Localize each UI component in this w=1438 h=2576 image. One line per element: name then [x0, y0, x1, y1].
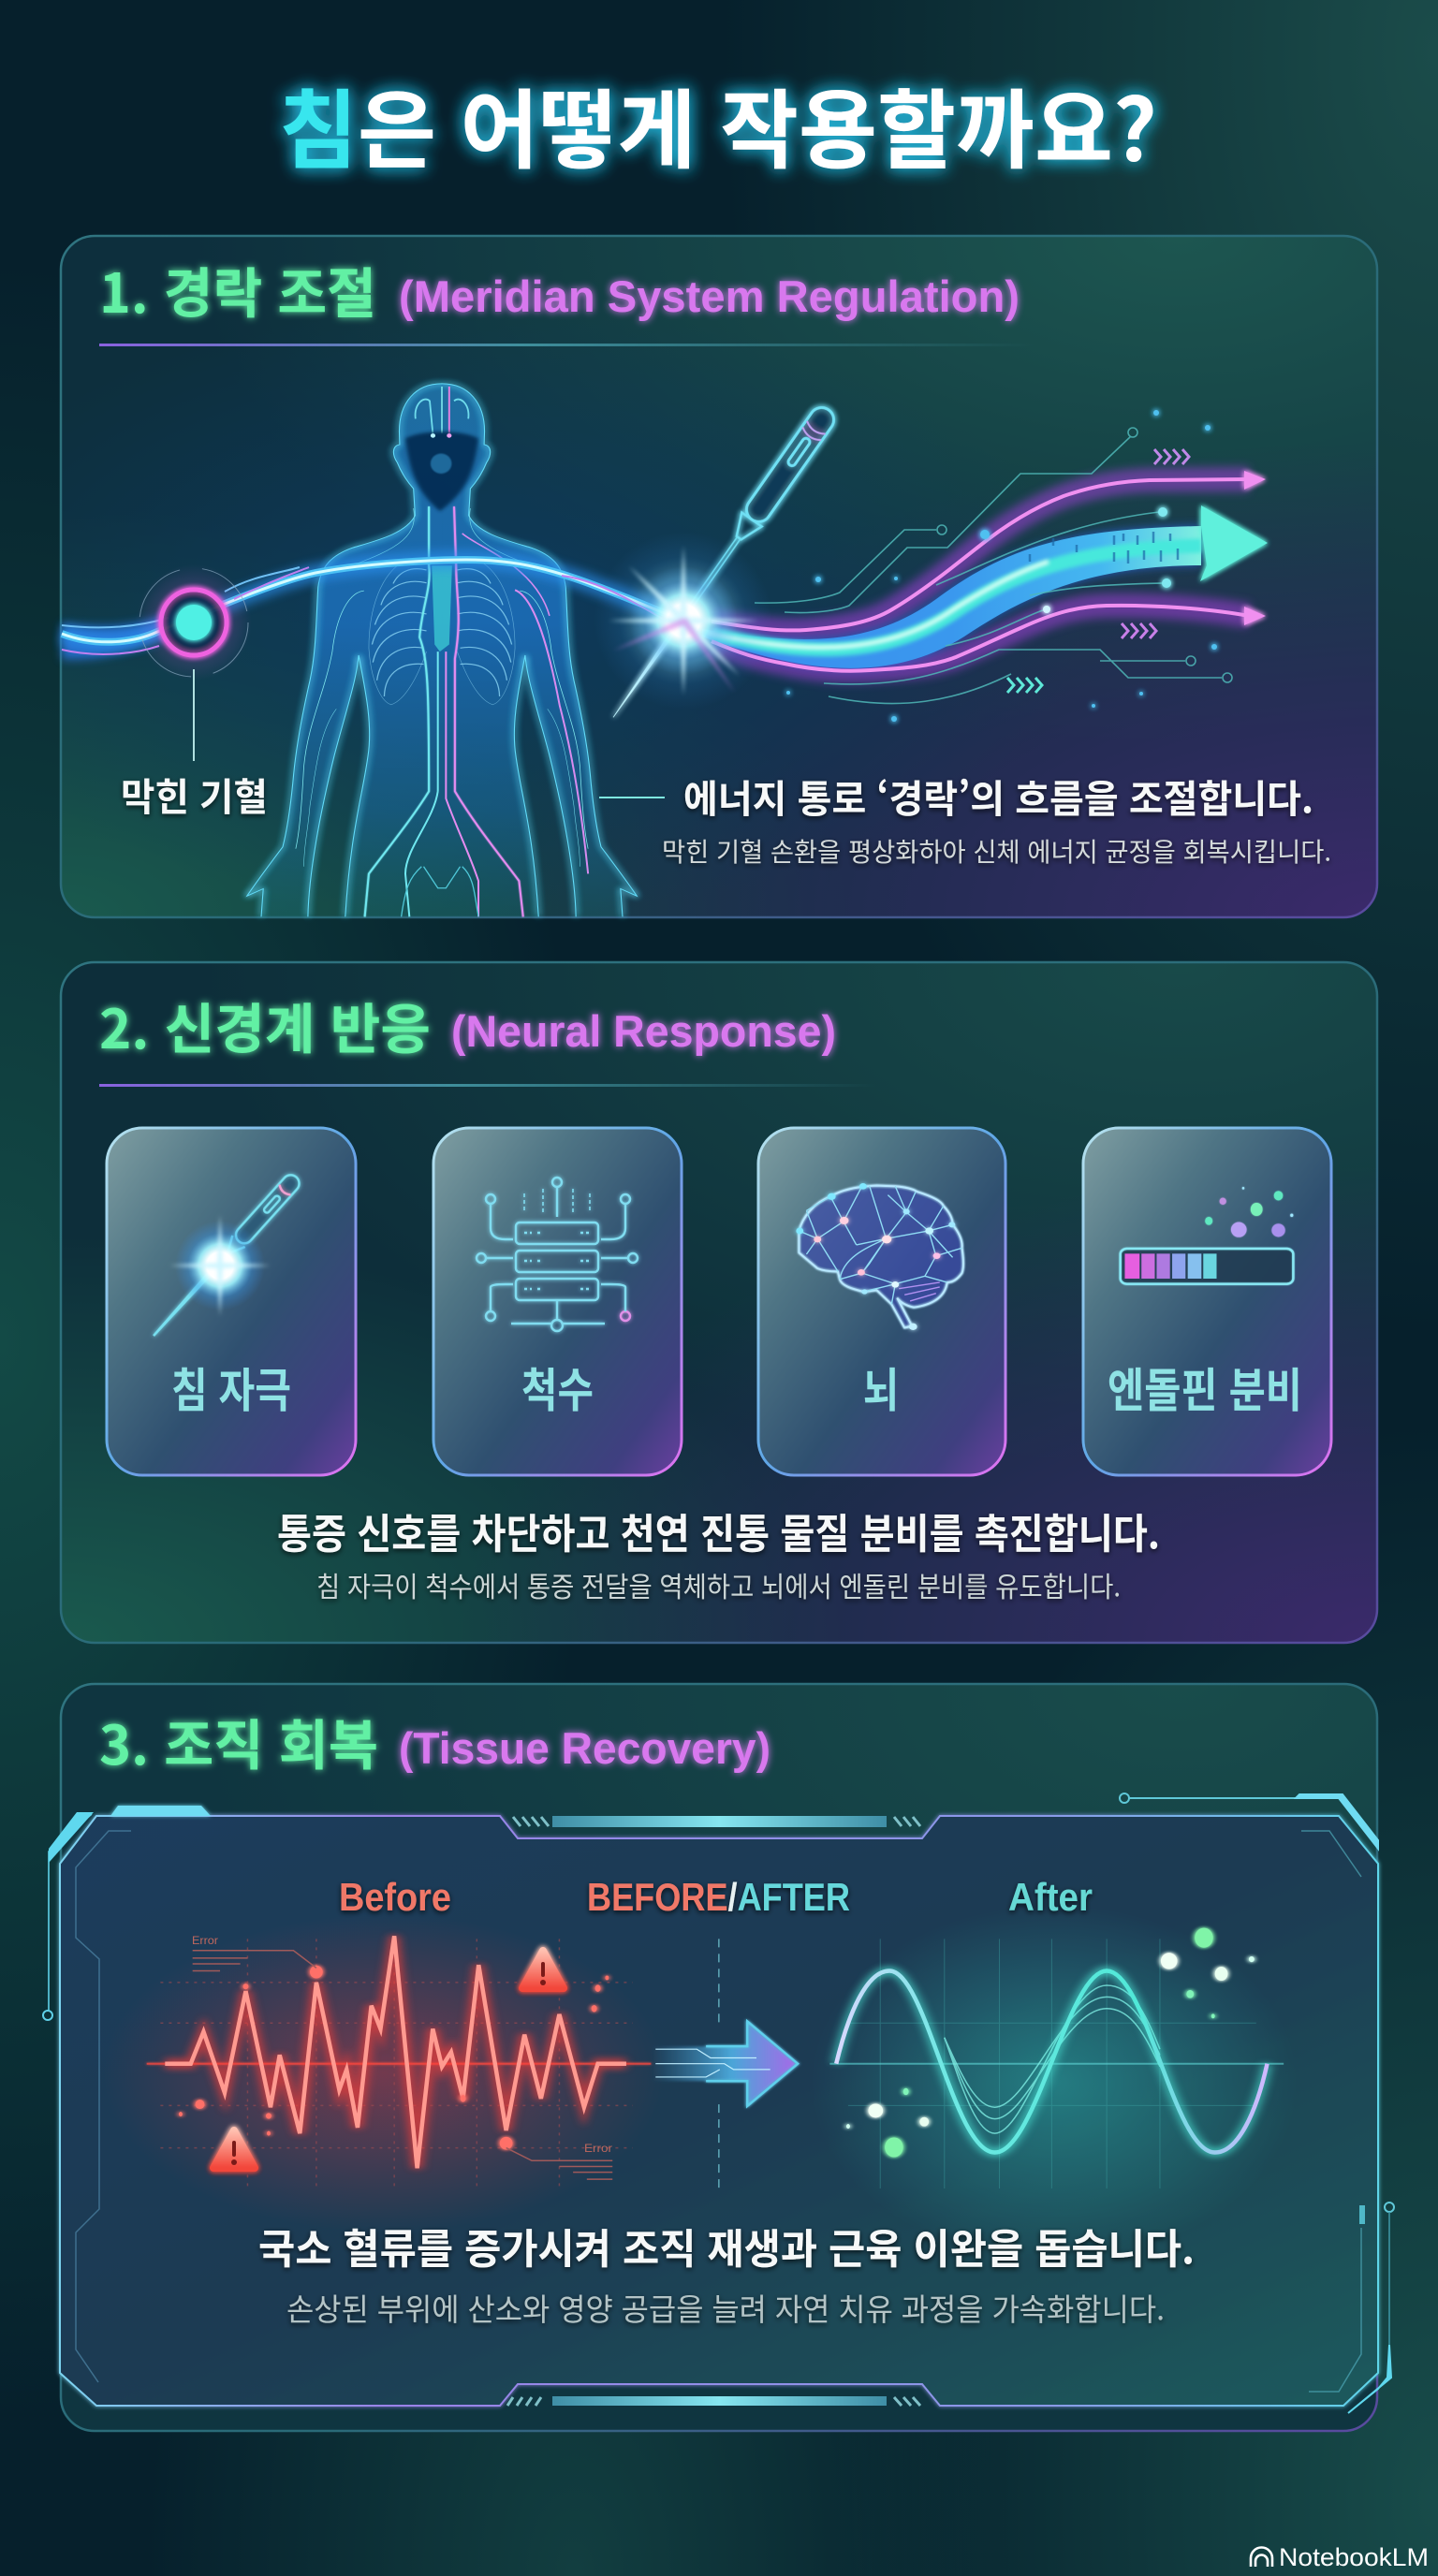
soft glows behind charts [103, 1905, 1298, 2261]
small error labels: Error [192, 1934, 218, 1947]
icon: notebook arcs [1251, 2548, 1272, 2567]
wordmark: NotebookLM [1279, 2543, 1429, 2571]
heading 2 english: (Neural Response) [451, 1006, 836, 1056]
card: needle stimulus [107, 1128, 356, 1475]
title: 침은 어떻게 작용할까요? [279, 62, 1157, 186]
heading 3 korean: 3. 조직 회복 [99, 1702, 378, 1780]
left meridian flow [62, 560, 683, 659]
panel: 3 tissue recovery [43, 1684, 1394, 2431]
icon: warning triangle bottom [213, 2130, 255, 2168]
small glow dots [786, 410, 1217, 722]
label: after: After [1008, 1875, 1093, 1919]
label: before: Before [339, 1875, 451, 1919]
label: 침 자극 [171, 1354, 291, 1421]
icon: glowing brain [796, 1183, 963, 1330]
icon: progress bar with particles [1121, 1187, 1293, 1284]
right flow streams [702, 479, 1249, 671]
center arrow [651, 1939, 798, 2188]
icon: needle with spark [147, 1172, 302, 1341]
card: spinal cord [433, 1128, 682, 1475]
panel 2 statement: 통증 신호를 차단하고 천연 진통 물질 분비를 촉진합니다. [277, 1500, 1160, 1560]
chart: irregular red signal [147, 1936, 651, 2188]
small error labels: Error [584, 2142, 612, 2155]
panel 3 detail: 손상된 부위에 산소와 영양 공급을 늘려 자연 치유 과정을 가속화합니다. [286, 2285, 1165, 2330]
heading 1 english: (Meridian System Regulation) [399, 271, 1020, 321]
panel 3 background [61, 1684, 1377, 2431]
needle puncture star [594, 532, 772, 710]
chevrons [1007, 449, 1189, 693]
heading 1 korean: 1. 경락 조절 [99, 250, 376, 329]
sci-fi frame [43, 1793, 1394, 2413]
icon: spine server stack [477, 1178, 638, 1331]
label: before/after: BEFORE/AFTER [587, 1875, 850, 1919]
logo: NotebookLM [1251, 2543, 1429, 2571]
label: 엔돌핀 분비 [1108, 1354, 1302, 1421]
panel 1 statement: 에너지 통로 ‘경락’의 흐름을 조절합니다. [683, 768, 1313, 824]
panel: 1 meridian regulation [61, 236, 1377, 917]
label: 척수 [521, 1354, 594, 1421]
human body with meridians [247, 384, 637, 916]
panel 2 background [61, 962, 1377, 1643]
circuit lines [755, 428, 1232, 704]
label: blocked point: 막힌 기혈 [121, 766, 268, 822]
icon: acupuncture needle [603, 402, 839, 724]
chart: smooth teal sine wave [829, 1928, 1284, 2188]
card: brain [758, 1128, 1005, 1475]
card: endorphin release [1083, 1128, 1331, 1475]
heading 3 english: (Tissue Recovery) [399, 1723, 770, 1773]
panel 1 detail: 막힌 기혈 손환을 평상화하아 신체 에너지 균정을 회복시킵니다. [662, 832, 1331, 870]
panel 2 detail: 침 자극이 척수에서 통증 전달을 역체하고 뇌에서 엔돌린 분비를 유도합니다. [316, 1564, 1121, 1605]
panel 1 background [61, 236, 1377, 917]
icon: warning triangle top [522, 1951, 564, 1988]
panel: 2 neural response [61, 962, 1377, 1643]
arrowheads [1200, 471, 1268, 625]
panel 3 statement: 국소 혈류를 증가시켜 조직 재생과 근육 이완을 돕습니다. [258, 2216, 1195, 2276]
heading 2 korean: 2. 신경계 반응 [99, 986, 431, 1064]
small error labels [192, 1934, 612, 2155]
label: 뇌 [863, 1354, 899, 1421]
icon: blocked acupoint [136, 564, 252, 681]
